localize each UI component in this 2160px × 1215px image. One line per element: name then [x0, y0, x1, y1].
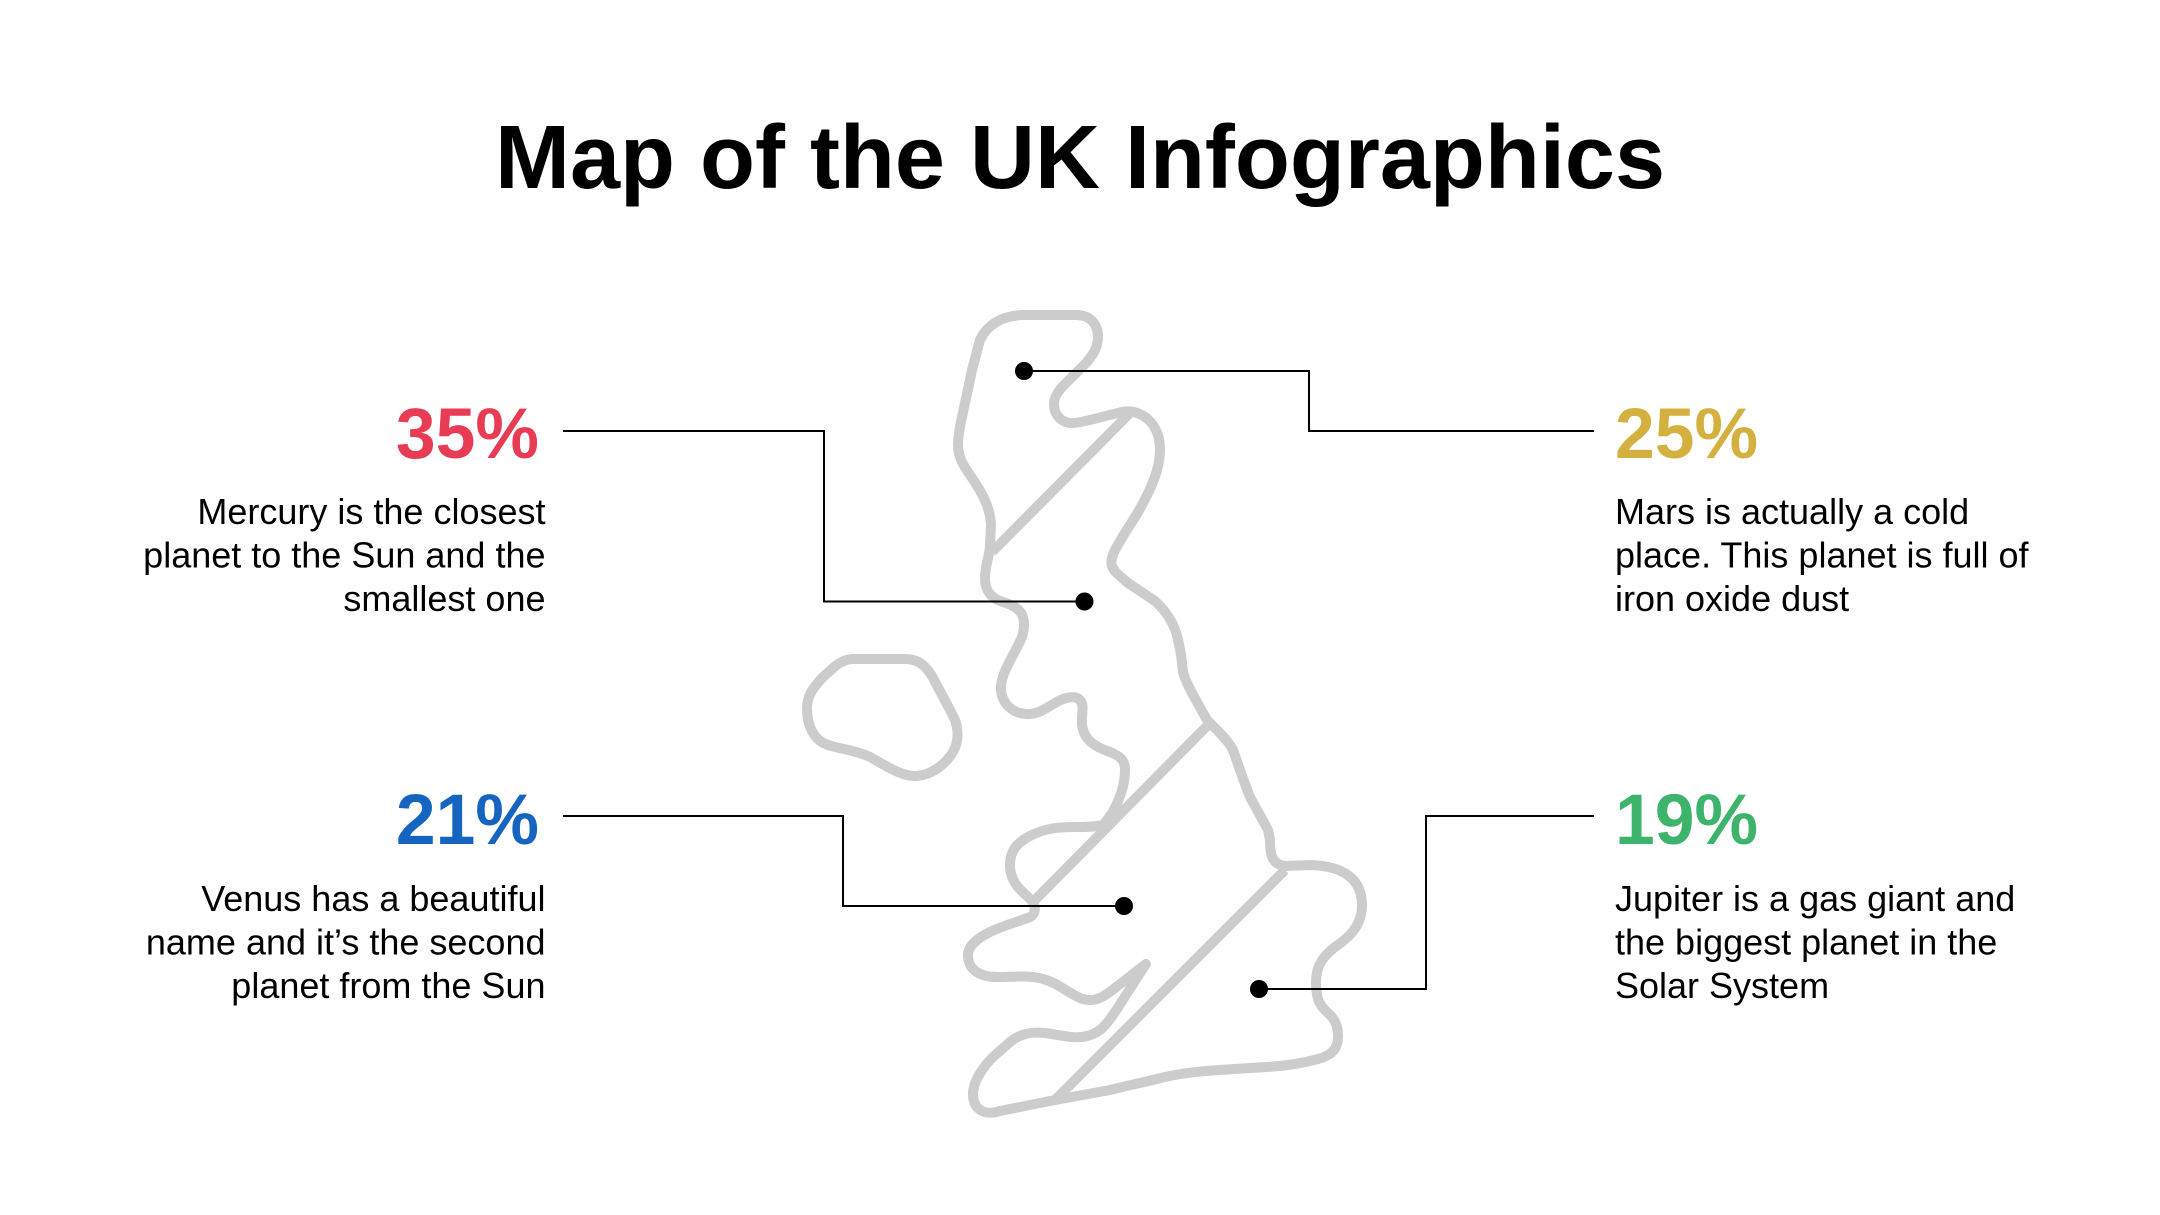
- callout: 21% Venus: [146, 780, 546, 1006]
- map: Scotland border: [992, 414, 1129, 552]
- title: Map of the UK Infographics: [495, 108, 1665, 208]
- callout: 35% Mercury: [143, 394, 546, 619]
- callout: 19% Jupiter: [1615, 780, 2015, 1006]
- callout: 25% Mars: [1615, 394, 2030, 619]
- percentage: 25%: 25%: [1615, 394, 1758, 474]
- percentage: 19%: 19%: [1615, 780, 1758, 860]
- text: Mercury: smallest one: [343, 578, 546, 619]
- text: Venus: name and it’s the second: [146, 922, 546, 962]
- connector: 19%: [1250, 816, 1594, 998]
- map of the UK: [807, 315, 1362, 1113]
- connector: 21%: [563, 816, 1133, 915]
- map: England south border: [1055, 870, 1285, 1100]
- connector: 35%: [563, 431, 1094, 610]
- text: Mars: place. This planet is full of: [1615, 534, 2030, 576]
- text: Mercury: planet to the Sun and the: [143, 534, 546, 576]
- map: Ireland outline: [807, 659, 958, 776]
- text: Mars: Mars is actually a cold: [1615, 491, 1969, 532]
- text: Jupiter: the biggest planet in the: [1615, 922, 1997, 962]
- percentage: 21%: 21%: [396, 780, 539, 860]
- text: Jupiter: Solar System: [1615, 965, 1829, 1006]
- text: Venus: planet from the Sun: [231, 965, 546, 1006]
- text: Venus: Venus has a beautiful: [201, 878, 546, 919]
- connector: 25%: [1015, 362, 1594, 431]
- percentage: 35%: 35%: [396, 394, 539, 474]
- text: Jupiter: Jupiter is a gas giant and: [1615, 878, 2015, 919]
- text: Mars: iron oxide dust: [1615, 578, 1849, 619]
- map: Great Britain outline: [958, 315, 1362, 1113]
- map: Wales north border: [1033, 725, 1208, 902]
- text: Mercury: Mercury is the closest: [197, 491, 546, 532]
